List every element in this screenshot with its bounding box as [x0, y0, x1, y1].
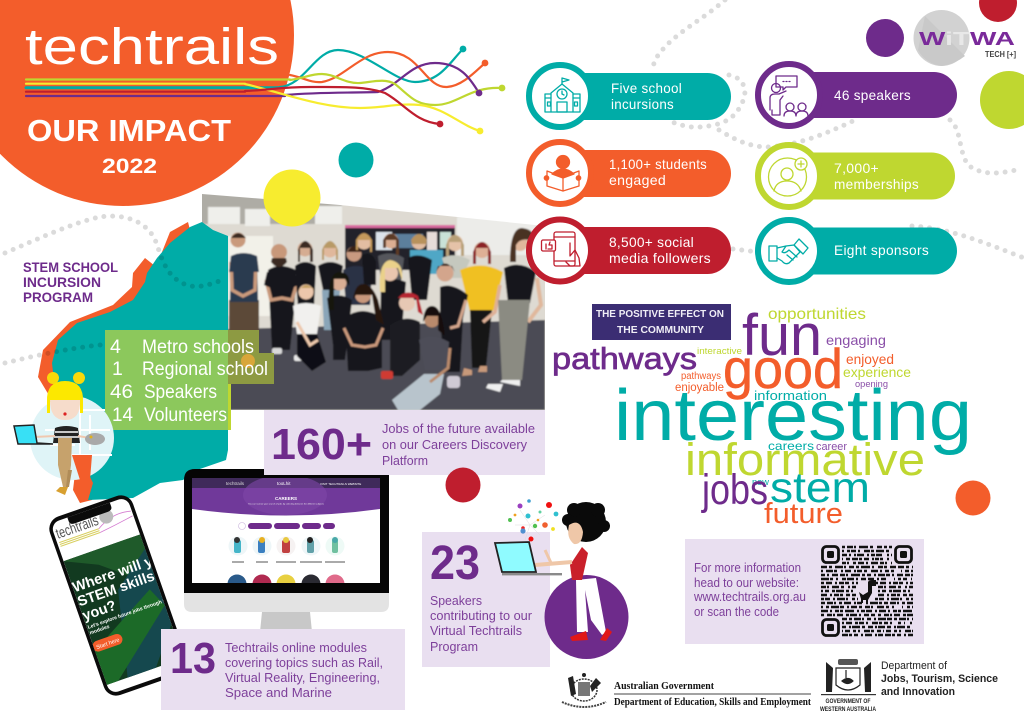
- word cloud: interesting: [614, 376, 972, 456]
- callout: metro schools stats: [105, 330, 274, 430]
- logo: WiTWA Tech [+]: W iT WA: [919, 29, 1015, 49]
- word cloud: jobs: [700, 466, 768, 514]
- heading: the positive effect on the community: [592, 304, 731, 340]
- pill: students engaged: 1,100+ students: [609, 156, 707, 172]
- pill: memberships: [758, 145, 955, 207]
- character: woman at laptop with network: [495, 499, 628, 659]
- panel: 23 speakers: [422, 532, 550, 667]
- logo trails: coloured lines with end dots: [26, 46, 505, 134]
- heading: the positive effect on the community: THE POSITIVE EFFECT ON: [596, 308, 724, 320]
- word cloud: experience: [843, 364, 911, 380]
- word cloud: [552, 303, 972, 530]
- desktop monitor mock-up: [184, 469, 389, 634]
- desktop monitor mock-up: CAREERS: [275, 496, 297, 501]
- panel: 23 speakers: Virtual Techtrails: [430, 623, 522, 638]
- word cloud: career: [816, 441, 847, 453]
- group photo: [200, 188, 547, 414]
- icon: handshake: [769, 239, 808, 264]
- callout: metro schools stats: 46: [110, 381, 133, 403]
- phone mock-up: modules: [89, 624, 111, 636]
- word cloud: good: [723, 337, 843, 400]
- decorative orange circle: [956, 480, 990, 516]
- desktop monitor mock-up: VISIT TECHTRAILS WEBSITE: [320, 482, 361, 486]
- panel: 13 online modules: Techtrails online modules: [225, 640, 367, 655]
- callout: metro schools stats: Metro schools: [142, 336, 254, 358]
- desktop monitor mock-up: techtrails: [226, 481, 245, 486]
- pill: memberships: memberships: [834, 176, 919, 192]
- panel: 160+ jobs: [264, 410, 545, 475]
- icon: speaker and audience: [770, 76, 808, 116]
- logo: Government of Western Australia: [820, 659, 998, 713]
- desktop monitor mock-up: tooLhit: [277, 481, 291, 486]
- pill: five school incursions: incursions: [611, 96, 674, 112]
- phone mock-up: STEM skills ta: [75, 563, 174, 610]
- logo: WiTWA Tech [+]: TECH [+]: [985, 50, 1016, 59]
- phone mock-up: techtrails: [54, 512, 101, 543]
- pill: 46 speakers: [758, 64, 957, 126]
- icon: reader with book: [544, 156, 581, 191]
- year: 2022: [102, 155, 157, 178]
- panel: 13 online modules: [161, 629, 405, 710]
- decorative dotted trails: over the map: [5, 216, 226, 370]
- pill: five school incursions: Five school: [611, 80, 682, 96]
- title: our impact: OUR IMPACT: [27, 113, 231, 148]
- logo: techtrails wordmark: techtrails: [25, 18, 279, 75]
- pill: social media followers: [529, 220, 731, 282]
- word cloud: fun: [742, 303, 822, 368]
- panel: 160+ jobs: on our Careers Discovery: [382, 437, 527, 452]
- pill: eight sponsors: Eight sponsors: [834, 242, 929, 258]
- panel: more information and QR code: or scan the code: [694, 604, 779, 619]
- map of Western Australia: [38, 222, 228, 503]
- callout: metro schools stats: Speakers: [144, 381, 217, 403]
- panel: 160+ jobs: Platform: [382, 453, 428, 468]
- panel: 13 online modules: Space and Marine: [225, 685, 332, 700]
- phone mock-up: Let's explore future jobs through the Tech: [87, 592, 183, 631]
- panel: 160+ jobs: Jobs of the future available: [382, 421, 535, 436]
- panel: more information and QR code: [685, 539, 924, 644]
- panel: more information and QR code: For more information: [694, 560, 801, 575]
- decorative dotted trails: top right: [652, 0, 1024, 258]
- word cloud: engaging: [826, 332, 886, 348]
- pill: students engaged: engaged: [609, 172, 666, 188]
- decorative circles: purple, red and lime: [866, 0, 1024, 129]
- word cloud: stem: [770, 464, 870, 512]
- decorative teal circle: [338, 142, 374, 178]
- orange title circle: [0, 0, 294, 206]
- panel: 160+ jobs: 160+: [271, 420, 372, 469]
- word cloud: pathways: [552, 341, 697, 376]
- logo: Australian Government: [562, 673, 812, 708]
- word cloud: enjoyed: [846, 351, 894, 367]
- heading: STEM school incursion program: INCURSION: [23, 274, 101, 290]
- word cloud: enjoyable: [675, 382, 724, 394]
- pill: social media followers: 8,500+ social: [609, 234, 694, 250]
- pill: 46 speakers: 46 speakers: [834, 87, 911, 103]
- word cloud: interactive: [697, 346, 742, 357]
- heading: the positive effect on the community: THE COMMUNITY: [617, 324, 704, 336]
- word cloud: informative: [685, 434, 925, 485]
- heading: STEM school incursion program: STEM SCHOOL: [23, 259, 118, 275]
- phone mock-up: you?: [80, 598, 119, 624]
- panel: 13 online modules: covering topics such as Rail,: [225, 655, 383, 670]
- phone mock-up: [49, 495, 177, 696]
- callout: metro schools stats: Volunteers: [144, 404, 227, 426]
- decorative red circle: [446, 468, 480, 502]
- icon: phone and like: [542, 232, 580, 266]
- pill: five school incursions: [529, 65, 731, 127]
- crest: [562, 673, 606, 707]
- pill: eight sponsors: [758, 220, 957, 282]
- heading: STEM school incursion program: PROGRAM: [23, 289, 93, 305]
- panel: 23 speakers: Speakers: [430, 593, 482, 608]
- pill: students engaged: [529, 142, 731, 204]
- pill: memberships: 7,000+: [834, 160, 879, 176]
- phone mock-up: Start here: [96, 637, 120, 651]
- crest: [821, 659, 876, 695]
- logo: Government of Western Australia: Department of: [881, 660, 948, 672]
- word cloud: future: [764, 498, 843, 530]
- desktop monitor mock-up: You can narrow your search of jobs by selecting between the different subjects: [248, 502, 325, 506]
- callout: metro schools stats: 14: [112, 404, 133, 426]
- back row people: [229, 228, 541, 392]
- phone mock-up: Where will yo: [71, 550, 163, 596]
- panel: more information and QR code: head to our website:: [694, 575, 799, 590]
- logo: Government of Western Australia: WESTERN AUSTRALIA: [820, 707, 877, 713]
- panel: 23 speakers: 23: [430, 537, 480, 590]
- word cloud: opportunities: [768, 306, 866, 323]
- word cloud: careers: [768, 439, 814, 453]
- logo: Australian Government: Australian Government: [614, 681, 714, 692]
- word cloud: pathways: [681, 371, 721, 382]
- word cloud: information: [754, 388, 827, 403]
- panel: more information and QR code: www.techtrails.org.au: [693, 589, 806, 604]
- decorative yellow circle: [264, 170, 320, 226]
- word cloud: opening: [855, 379, 888, 390]
- icon: school: [545, 78, 580, 112]
- logo: Government of Western Australia: GOVERNMENT OF: [826, 699, 871, 705]
- logo: WiTWA Tech [+]: [914, 10, 1016, 66]
- heading: STEM school incursion program: [23, 259, 118, 305]
- front row people: [293, 260, 468, 410]
- panel: 23 speakers: Program: [430, 639, 478, 654]
- logo: Australian Government: Department of Education, Skills and Employment: [614, 697, 812, 708]
- word cloud: new: [752, 477, 770, 487]
- icon: member plus: [768, 158, 807, 196]
- QR code: [821, 546, 913, 636]
- panel: 13 online modules: Virtual Reality, Engineering,: [225, 670, 380, 685]
- callout: metro schools stats: 1: [112, 358, 123, 380]
- callout: metro schools stats: Regional school: [142, 358, 268, 380]
- panel: 13 online modules: 13: [170, 634, 216, 683]
- logo: Government of Western Australia: Jobs, Tourism, Science: [881, 673, 998, 685]
- character: girl with laptop: [14, 372, 114, 495]
- logo: Government of Western Australia: and Innovation: [881, 686, 955, 698]
- pill: social media followers: media followers: [609, 250, 711, 266]
- panel: 23 speakers: contributing to our: [430, 608, 533, 623]
- callout: metro schools stats: 4: [110, 336, 121, 358]
